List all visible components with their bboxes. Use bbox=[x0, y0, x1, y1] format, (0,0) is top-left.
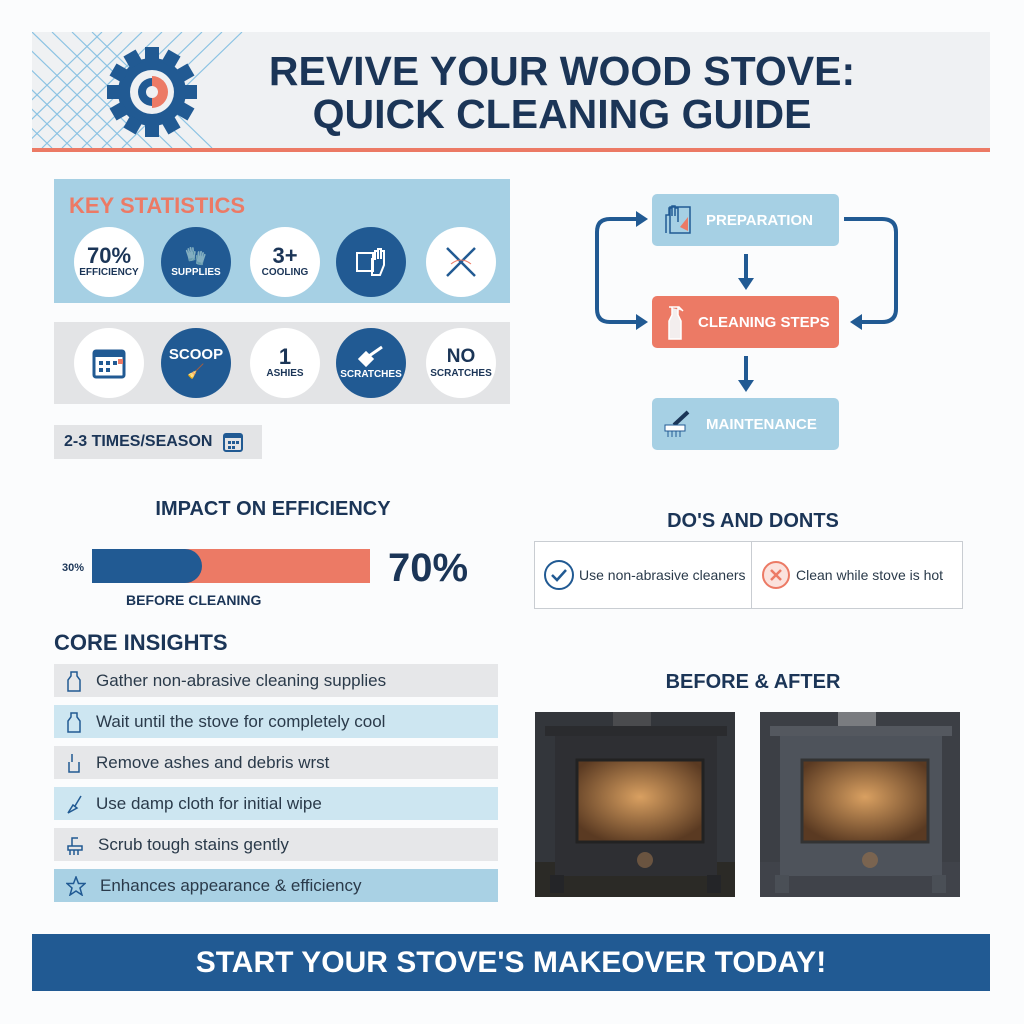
row 6: Enhances appearance & efficiency bbox=[100, 876, 361, 894]
heading: do's and donts: DO'S AND DONTS bbox=[667, 510, 839, 532]
row 3 bbox=[54, 746, 498, 779]
header banner bbox=[32, 32, 990, 152]
step: preparation: PREPARATION bbox=[706, 212, 813, 228]
callout: frequency: 2-3 TIMES/SEASON bbox=[64, 433, 212, 450]
icon: glove bbox=[336, 227, 406, 297]
do bbox=[535, 542, 752, 608]
row 2 bbox=[54, 705, 498, 738]
title bbox=[269, 48, 855, 137]
decorative stripes bbox=[32, 32, 242, 148]
dont: Clean while stove is hot bbox=[796, 567, 943, 583]
stat: no scratches bbox=[426, 328, 496, 398]
heading: core insights: CORE INSIGHTS bbox=[54, 630, 228, 655]
title: QUICK CLEANING GUIDE bbox=[313, 91, 811, 137]
title: REVIVE YOUR WOOD STOVE: bbox=[269, 48, 855, 94]
image: stove after bbox=[760, 712, 960, 897]
stat: 70% efficiency bbox=[74, 227, 144, 297]
callout: frequency bbox=[54, 425, 262, 459]
row 5 bbox=[54, 828, 498, 861]
stat: scratches bbox=[336, 328, 406, 398]
row 2: Wait until the stove for completely cool bbox=[96, 712, 385, 730]
row 4 bbox=[54, 787, 498, 820]
flowchart bbox=[595, 194, 898, 450]
stat: no scratches: NO bbox=[447, 346, 475, 367]
stat: supplies bbox=[161, 227, 231, 297]
stat: 70% efficiency: 70% bbox=[87, 243, 131, 268]
row 3: Remove ashes and debris wrst bbox=[96, 752, 329, 772]
stat: scratches: SCRATCHES bbox=[340, 369, 402, 380]
image: stove before bbox=[535, 712, 735, 897]
stat: 1 ashes: 1 bbox=[279, 344, 291, 369]
stat: 70% efficiency: EFFICIENCY bbox=[79, 267, 139, 278]
stat: 3+ cooling bbox=[250, 227, 320, 297]
footer banner bbox=[32, 934, 990, 991]
list: core insights bbox=[54, 664, 498, 902]
panel: do's and donts bbox=[534, 541, 963, 609]
heading: before & after: BEFORE & AFTER bbox=[666, 671, 840, 693]
row 1: Gather non-abrasive cleaning supplies bbox=[96, 670, 386, 690]
stat: supplies: SUPPLIES bbox=[171, 266, 221, 278]
row 4: Use damp cloth for initial wipe bbox=[96, 794, 322, 812]
panel: tips circles bbox=[54, 322, 510, 404]
step: cleaning steps bbox=[652, 296, 839, 348]
stat: 3+ cooling: COOLING bbox=[262, 267, 308, 278]
stat: scoop bbox=[161, 328, 231, 398]
bar chart: efficiency: 70% bbox=[388, 546, 468, 590]
step: maintenance bbox=[652, 398, 839, 450]
stat: no scratches: SCRATCHES bbox=[430, 368, 492, 379]
icon: calendar bbox=[74, 328, 144, 398]
stat: supplies: 🧤 bbox=[185, 246, 207, 266]
icon: no scratches bbox=[426, 227, 496, 297]
step: maintenance: MAINTENANCE bbox=[706, 416, 817, 432]
bar chart: efficiency: BEFORE CLEANING bbox=[126, 592, 261, 608]
row 5: Scrub tough stains gently bbox=[98, 834, 289, 854]
bar chart: efficiency: 30% bbox=[62, 562, 84, 574]
icon: gear bbox=[107, 47, 197, 137]
dont bbox=[762, 561, 943, 589]
row 1 bbox=[54, 664, 498, 697]
step: preparation bbox=[652, 194, 839, 246]
stat: scoop: 🧹 bbox=[187, 363, 205, 379]
heading: impact on efficiency: IMPACT ON EFFICIENCY bbox=[155, 498, 391, 520]
stat: 1 ashes: ASHIES bbox=[266, 368, 304, 379]
heading: key statistics: KEY STATISTICS bbox=[69, 193, 245, 218]
do: Use non-abrasive cleaners bbox=[579, 567, 746, 583]
stat: 3+ cooling: 3+ bbox=[272, 243, 298, 268]
row 6 bbox=[54, 869, 498, 902]
step: cleaning steps: CLEANING STEPS bbox=[698, 314, 830, 330]
stat: 1 ashes bbox=[250, 328, 320, 398]
stat: scoop: SCOOP bbox=[169, 346, 223, 363]
bar chart: efficiency bbox=[62, 546, 468, 608]
footer banner: START YOUR STOVE'S MAKEOVER TODAY! bbox=[196, 946, 826, 978]
panel: key statistics bbox=[54, 179, 510, 303]
